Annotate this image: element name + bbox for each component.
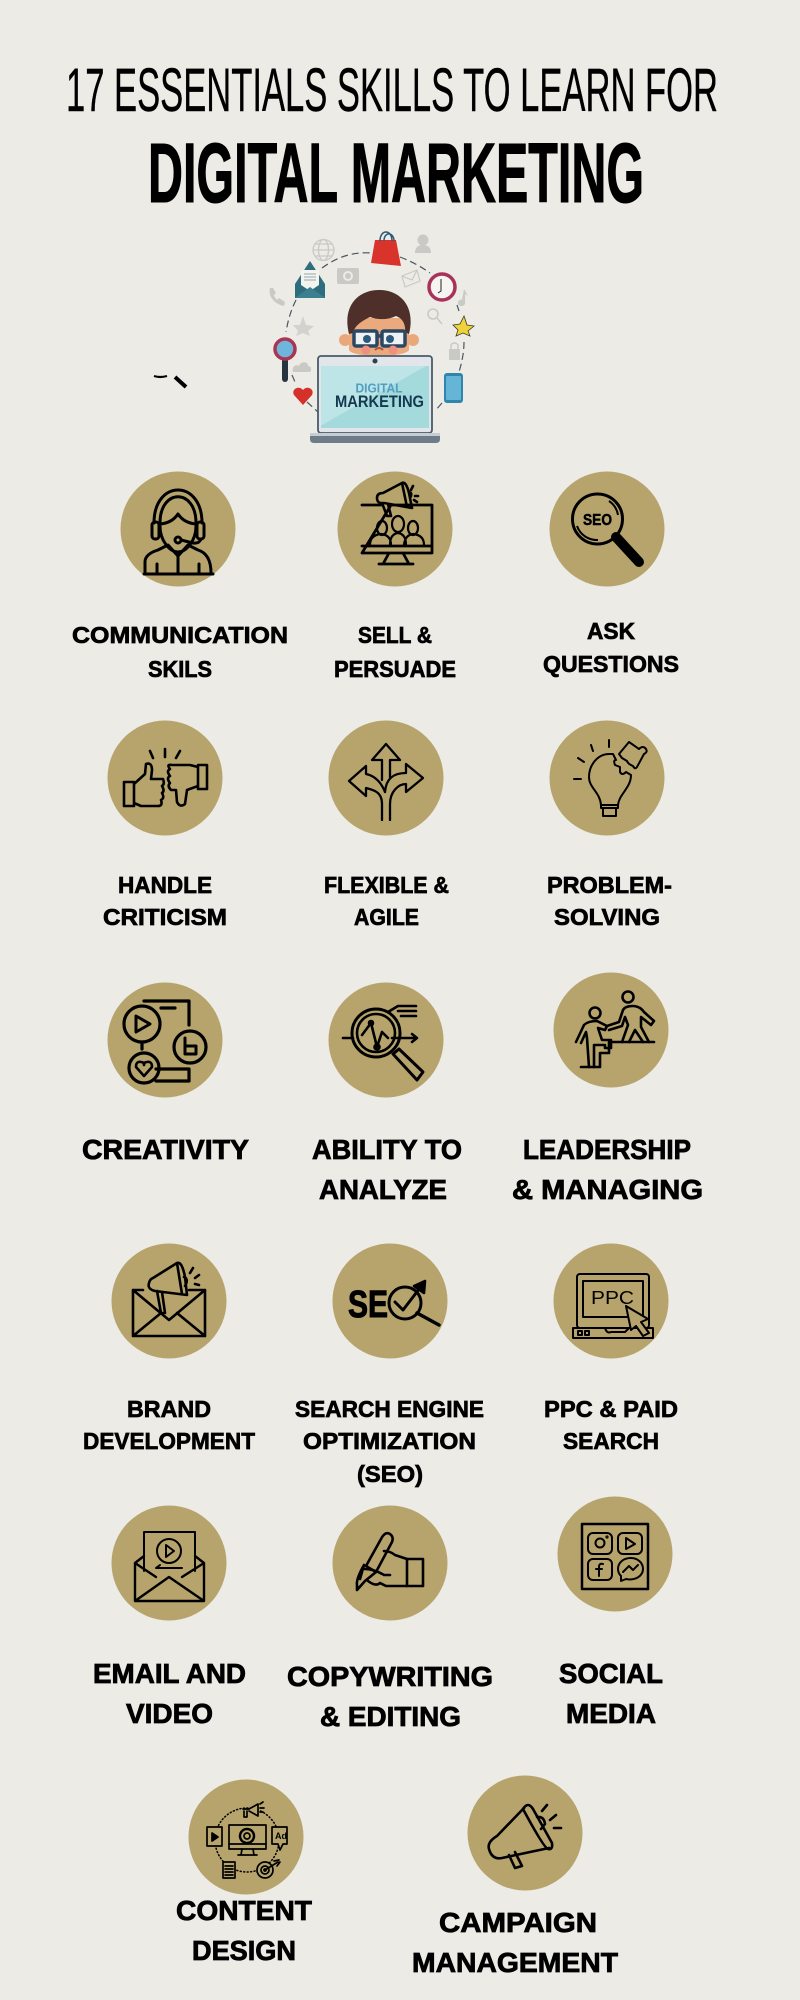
label: VIDEO <box>126 1698 213 1729</box>
label: SKILS <box>148 656 212 682</box>
skill: copywriting & editing <box>287 1506 493 1732</box>
label <box>176 1895 312 1966</box>
label: CRITICISM <box>103 904 227 930</box>
label: PERSUADE <box>334 656 456 682</box>
icon: small envelope <box>402 270 420 287</box>
icon: megaphone <box>489 1805 561 1868</box>
label: PPC & PAID <box>544 1396 678 1422</box>
face <box>349 318 409 356</box>
skill: handle criticism <box>103 720 227 930</box>
skill: search engine optimization <box>295 1244 484 1487</box>
label <box>312 1134 462 1205</box>
icon: ppc computer <box>573 1274 653 1338</box>
icon: teal envelope <box>295 261 325 298</box>
skill: email and video <box>93 1506 246 1729</box>
label: & MANAGING <box>512 1174 703 1205</box>
label <box>334 622 456 682</box>
skill: flexible & agile <box>324 720 449 930</box>
icon: seo with arrow: SE <box>348 1284 388 1326</box>
icon: grey magnifier <box>428 309 442 324</box>
icon: music note <box>458 289 468 306</box>
skill: leadership & managing <box>512 972 703 1205</box>
icon: envelope megaphone <box>133 1263 205 1336</box>
label <box>512 1134 703 1205</box>
icon: shopping bag <box>371 232 401 266</box>
cheeks and nose <box>362 346 370 354</box>
label: DESIGN <box>192 1935 296 1966</box>
ears <box>339 334 351 346</box>
label: SEARCH ENGINE <box>295 1396 484 1422</box>
icon: headset agent <box>144 490 213 574</box>
skill: communication skils <box>72 472 288 682</box>
icon: diverging arrows <box>349 744 423 820</box>
icon: social app grid <box>582 1524 648 1589</box>
skill: ability to analyze <box>312 982 462 1205</box>
label <box>72 622 288 682</box>
label: ANALYZE <box>319 1174 447 1205</box>
icon: seo magnifier <box>572 494 639 562</box>
icon: content cycle: Ad <box>275 1831 287 1841</box>
icon: social media bubbles <box>124 1001 206 1083</box>
skill: social media <box>558 1496 672 1729</box>
icon: seo with arrow <box>348 1281 439 1326</box>
icon: thumbs up and down <box>124 749 207 806</box>
icon: camera <box>337 268 359 284</box>
screen text: DIGITAL <box>356 380 403 396</box>
label <box>547 872 672 930</box>
character <box>339 290 419 356</box>
label: SOLVING <box>554 904 660 930</box>
label <box>93 1658 246 1729</box>
label <box>324 872 449 930</box>
icon: yellow star <box>453 316 474 336</box>
skill: content design <box>176 1780 312 1966</box>
label: SELL & <box>358 622 432 648</box>
label <box>103 872 227 930</box>
icon: grey star <box>293 316 314 336</box>
label: (SEO) <box>357 1461 423 1487</box>
skill: brand development <box>83 1244 255 1454</box>
skill: ask questions <box>543 472 679 677</box>
skill: creativity <box>82 982 249 1165</box>
icon: clock <box>429 274 455 300</box>
laptop: MARKETING <box>335 392 424 411</box>
label: DEVELOPMENT <box>83 1428 255 1454</box>
label: & EDITING <box>320 1701 461 1732</box>
icon: heart <box>293 388 313 405</box>
label: MANAGEMENT <box>412 1947 618 1978</box>
label: COMMUNICATION <box>72 622 288 648</box>
label <box>287 1661 493 1732</box>
stray pen stroke <box>154 376 186 387</box>
label: EMAIL AND <box>93 1658 246 1689</box>
label: CONTENT <box>176 1895 312 1926</box>
label: BRAND <box>127 1396 211 1422</box>
label: MEDIA <box>566 1698 656 1729</box>
icon: seo magnifier: SEO <box>583 512 612 529</box>
icon: crimson magnifier <box>275 339 295 382</box>
laptop <box>310 356 440 443</box>
icon: megaphone and monitor audience <box>362 483 432 564</box>
label <box>83 1396 255 1454</box>
label <box>412 1907 618 1978</box>
title <box>66 56 718 220</box>
label: SOCIAL <box>559 1658 663 1689</box>
icon: helping up stairs <box>576 992 654 1067</box>
skill: campaign management <box>412 1776 618 1978</box>
skill: ppc & paid search <box>544 1244 678 1454</box>
illustration: digital marketer at laptop <box>270 232 474 443</box>
skill: problem-solving <box>547 720 672 930</box>
glasses <box>354 331 405 346</box>
icon: blue phone <box>444 373 463 403</box>
label: OPTIMIZATION <box>303 1428 476 1454</box>
icon: hand writing <box>357 1533 423 1590</box>
icon: light bulb with puzzle <box>574 740 647 816</box>
icon: globe <box>313 240 334 260</box>
icon: content cycle <box>207 1802 287 1878</box>
label: HANDLE <box>118 872 212 898</box>
label: QUESTIONS <box>543 651 679 677</box>
label: SEARCH <box>563 1428 659 1454</box>
skill: sell & persuade <box>334 472 456 682</box>
label <box>543 618 679 677</box>
label: COPYWRITING <box>287 1661 493 1692</box>
icon: envelope with video <box>135 1532 204 1601</box>
hair <box>347 290 411 334</box>
icon: padlock <box>449 343 460 360</box>
icon: telephone <box>270 288 285 306</box>
icon: ppc computer: PPC <box>591 1288 634 1308</box>
label: FLEXIBLE & <box>324 872 449 898</box>
icon: grey person <box>415 234 431 253</box>
label <box>559 1658 663 1729</box>
label: LEADERSHIP <box>523 1134 691 1165</box>
icon: magnifier on chart <box>343 1006 423 1080</box>
label: CAMPAIGN <box>439 1907 597 1938</box>
icon: cloud <box>293 362 311 372</box>
label: AGILE <box>354 904 419 930</box>
label: PROBLEM- <box>547 872 672 898</box>
label <box>295 1396 484 1487</box>
label: ABILITY TO <box>312 1134 462 1165</box>
label: ASK <box>587 618 635 644</box>
label: CREATIVITY <box>82 1134 249 1165</box>
label <box>544 1396 678 1454</box>
